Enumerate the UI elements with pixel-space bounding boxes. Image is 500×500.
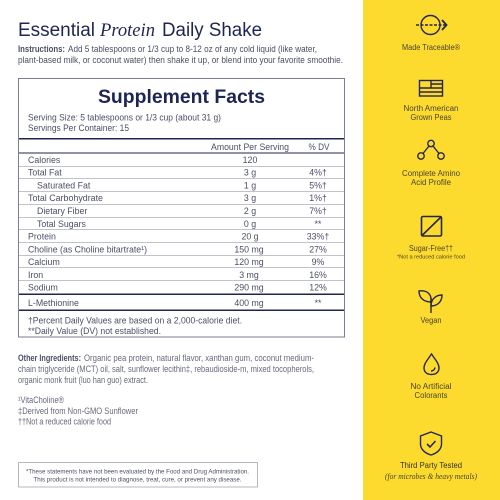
row: saturated fat: 1 g [244,180,256,190]
row: calcium: 9% [312,257,325,267]
FDA disclaimer box [18,462,258,487]
row: saturated fat: Saturated Fat [37,180,91,190]
row: total sugars: Total Sugars [37,219,86,229]
row: calcium: 120 mg [234,257,264,267]
instructions text: Instructions: [18,44,65,54]
title: Protein [99,20,155,41]
benefit: no artificial colorants: Colorants [414,391,448,400]
row: calcium [28,257,325,267]
table footnotes [28,316,242,336]
row: calories: Calories [28,155,61,165]
FDA disclaimer box: *These statements have not been evaluated by the Food and Drug Administration. [26,468,249,476]
serving information [28,112,221,133]
benefit: made traceable: Made Traceable® [402,43,460,52]
row: l-methionine: L-Methionine [28,298,79,308]
title: Daily Shake [162,20,262,41]
icon: flag [420,80,442,96]
row: iron: 16% [309,270,327,280]
instructions text: plant-based milk, or coconut water) then shake it up, or blend into your favorite smoothie. [18,55,343,65]
row: dietary fiber [37,206,327,216]
table header: % DV [308,142,330,152]
panel: yellow benefits sidebar [363,0,500,500]
row: choline: Choline (as Choline bitartrate¹) [28,244,147,254]
row: sodium: 290 mg [234,282,264,292]
icon: shield with check [420,432,442,455]
row: calcium: Calcium [28,257,60,267]
row: saturated fat [37,180,327,190]
benefit: no artificial colorants: No Artificial [410,382,452,391]
row: total carbohydrate [28,193,327,203]
icon: crossed square [422,216,442,236]
row: total carbohydrate: Total Carbohydrate [28,193,103,203]
row: calories [28,155,257,165]
row: total fat: Total Fat [28,168,62,178]
row: protein [28,232,329,242]
row: sodium: Sodium [28,282,58,292]
benefit: made traceable [402,16,460,52]
row: total sugars: ** [315,219,322,229]
benefit: third party tested: (for microbes & heavy metals) [385,472,477,481]
row: total fat: 4%† [309,168,327,178]
benefit: sugar-free: *Not a reduced calorie food [397,254,465,260]
row: dietary fiber: 7%† [309,206,327,216]
ingredient footnotes: ¹VitaCholine® [18,395,64,405]
row: choline [28,244,327,254]
benefit: third party tested [385,432,477,481]
table rules [19,138,344,311]
row: total fat [28,168,327,178]
other ingredients text [18,353,314,385]
row: total fat: 3 g [244,168,256,178]
ingredient footnotes [18,395,138,426]
serving information: Servings Per Container: 15 [28,123,129,133]
row: sodium: 12% [309,282,327,292]
icon: traced arrow through circle [416,16,446,34]
row: l-methionine: 400 mg [234,298,264,308]
benefit: complete amino acid profile [402,140,461,187]
row: iron [28,270,327,280]
benefit: vegan: Vegan [420,316,442,325]
panel: supplement facts [18,78,344,337]
benefit: sugar-free [397,216,465,260]
table footnotes: **Daily Value (DV) not established. [28,326,161,336]
row: total carbohydrate: 3 g [244,193,256,203]
ingredient footnotes: ††Not a reduced calorie food [18,416,111,426]
benefit: north american grown peas [404,80,458,122]
other ingredients text: organic monk fruit (luo han guo) extract. [18,375,148,385]
benefit: sugar-free: Sugar-Free†† [409,244,453,253]
benefit: no artificial colorants [410,354,452,400]
row: l-methionine: ** [315,298,322,308]
other ingredients text: Organic pea protein, natural flavor, xanthan gum, coconut medium- [84,353,314,363]
serving information: Serving Size: 5 tablespoons or 1/3 cup (about 31 g) [28,112,221,122]
benefit: third party tested: Third Party Tested [400,460,462,470]
row: l-methionine [28,298,322,308]
other ingredients text: chain triglyceride (MCT) oil, salt, sunflower lecithin‡, rebaudioside-m, mixed tocopherols, [18,364,314,374]
table header: Amount Per Serving [211,142,289,152]
row: sodium [28,282,327,292]
row: dietary fiber: Dietary Fiber [37,206,87,216]
row: iron: Iron [28,270,43,280]
row: protein: Protein [28,232,56,242]
row: iron: 3 mg [239,270,259,280]
row: protein: 33%† [307,232,329,242]
table footnotes: †Percent Daily Values are based on a 2,000-calorie diet. [28,316,242,326]
benefit: north american grown peas: North American [404,104,458,113]
row: choline: 27% [309,244,327,254]
benefit: north american grown peas: Grown Peas [410,113,452,122]
FDA disclaimer box: This product is not intended to diagnose, treat, cure, or prevent any disease. [34,476,242,484]
row: saturated fat: 5%† [309,180,327,190]
instructions text [18,44,343,65]
row: dietary fiber: 2 g [244,206,256,216]
row: choline: 150 mg [234,244,264,254]
table header [211,142,330,152]
row: total carbohydrate: 1%† [309,193,327,203]
row: total sugars: 0 g [244,219,256,229]
icon: water drop [424,354,439,374]
row: calories: 120 [243,155,257,165]
benefit: complete amino acid profile: Complete Amino [402,169,461,178]
instructions text: Add 5 tablespoons or 1/3 cup to 8-12 oz of any cold liquid (like water, [68,44,317,54]
benefit: vegan [419,291,442,325]
icon: molecule nodes [418,140,444,159]
row: protein: 20 g [241,232,259,242]
supplement facts heading: Supplement Facts [98,86,265,108]
ingredient footnotes: ‡Derived from Non-GMO Sunflower [18,406,138,416]
row: total sugars [37,219,322,229]
title: Essential [18,20,95,41]
benefit: complete amino acid profile: Acid Profile [411,178,452,187]
icon: sprout [419,291,442,313]
other ingredients text: Other Ingredients: [18,353,81,363]
title [18,20,262,41]
